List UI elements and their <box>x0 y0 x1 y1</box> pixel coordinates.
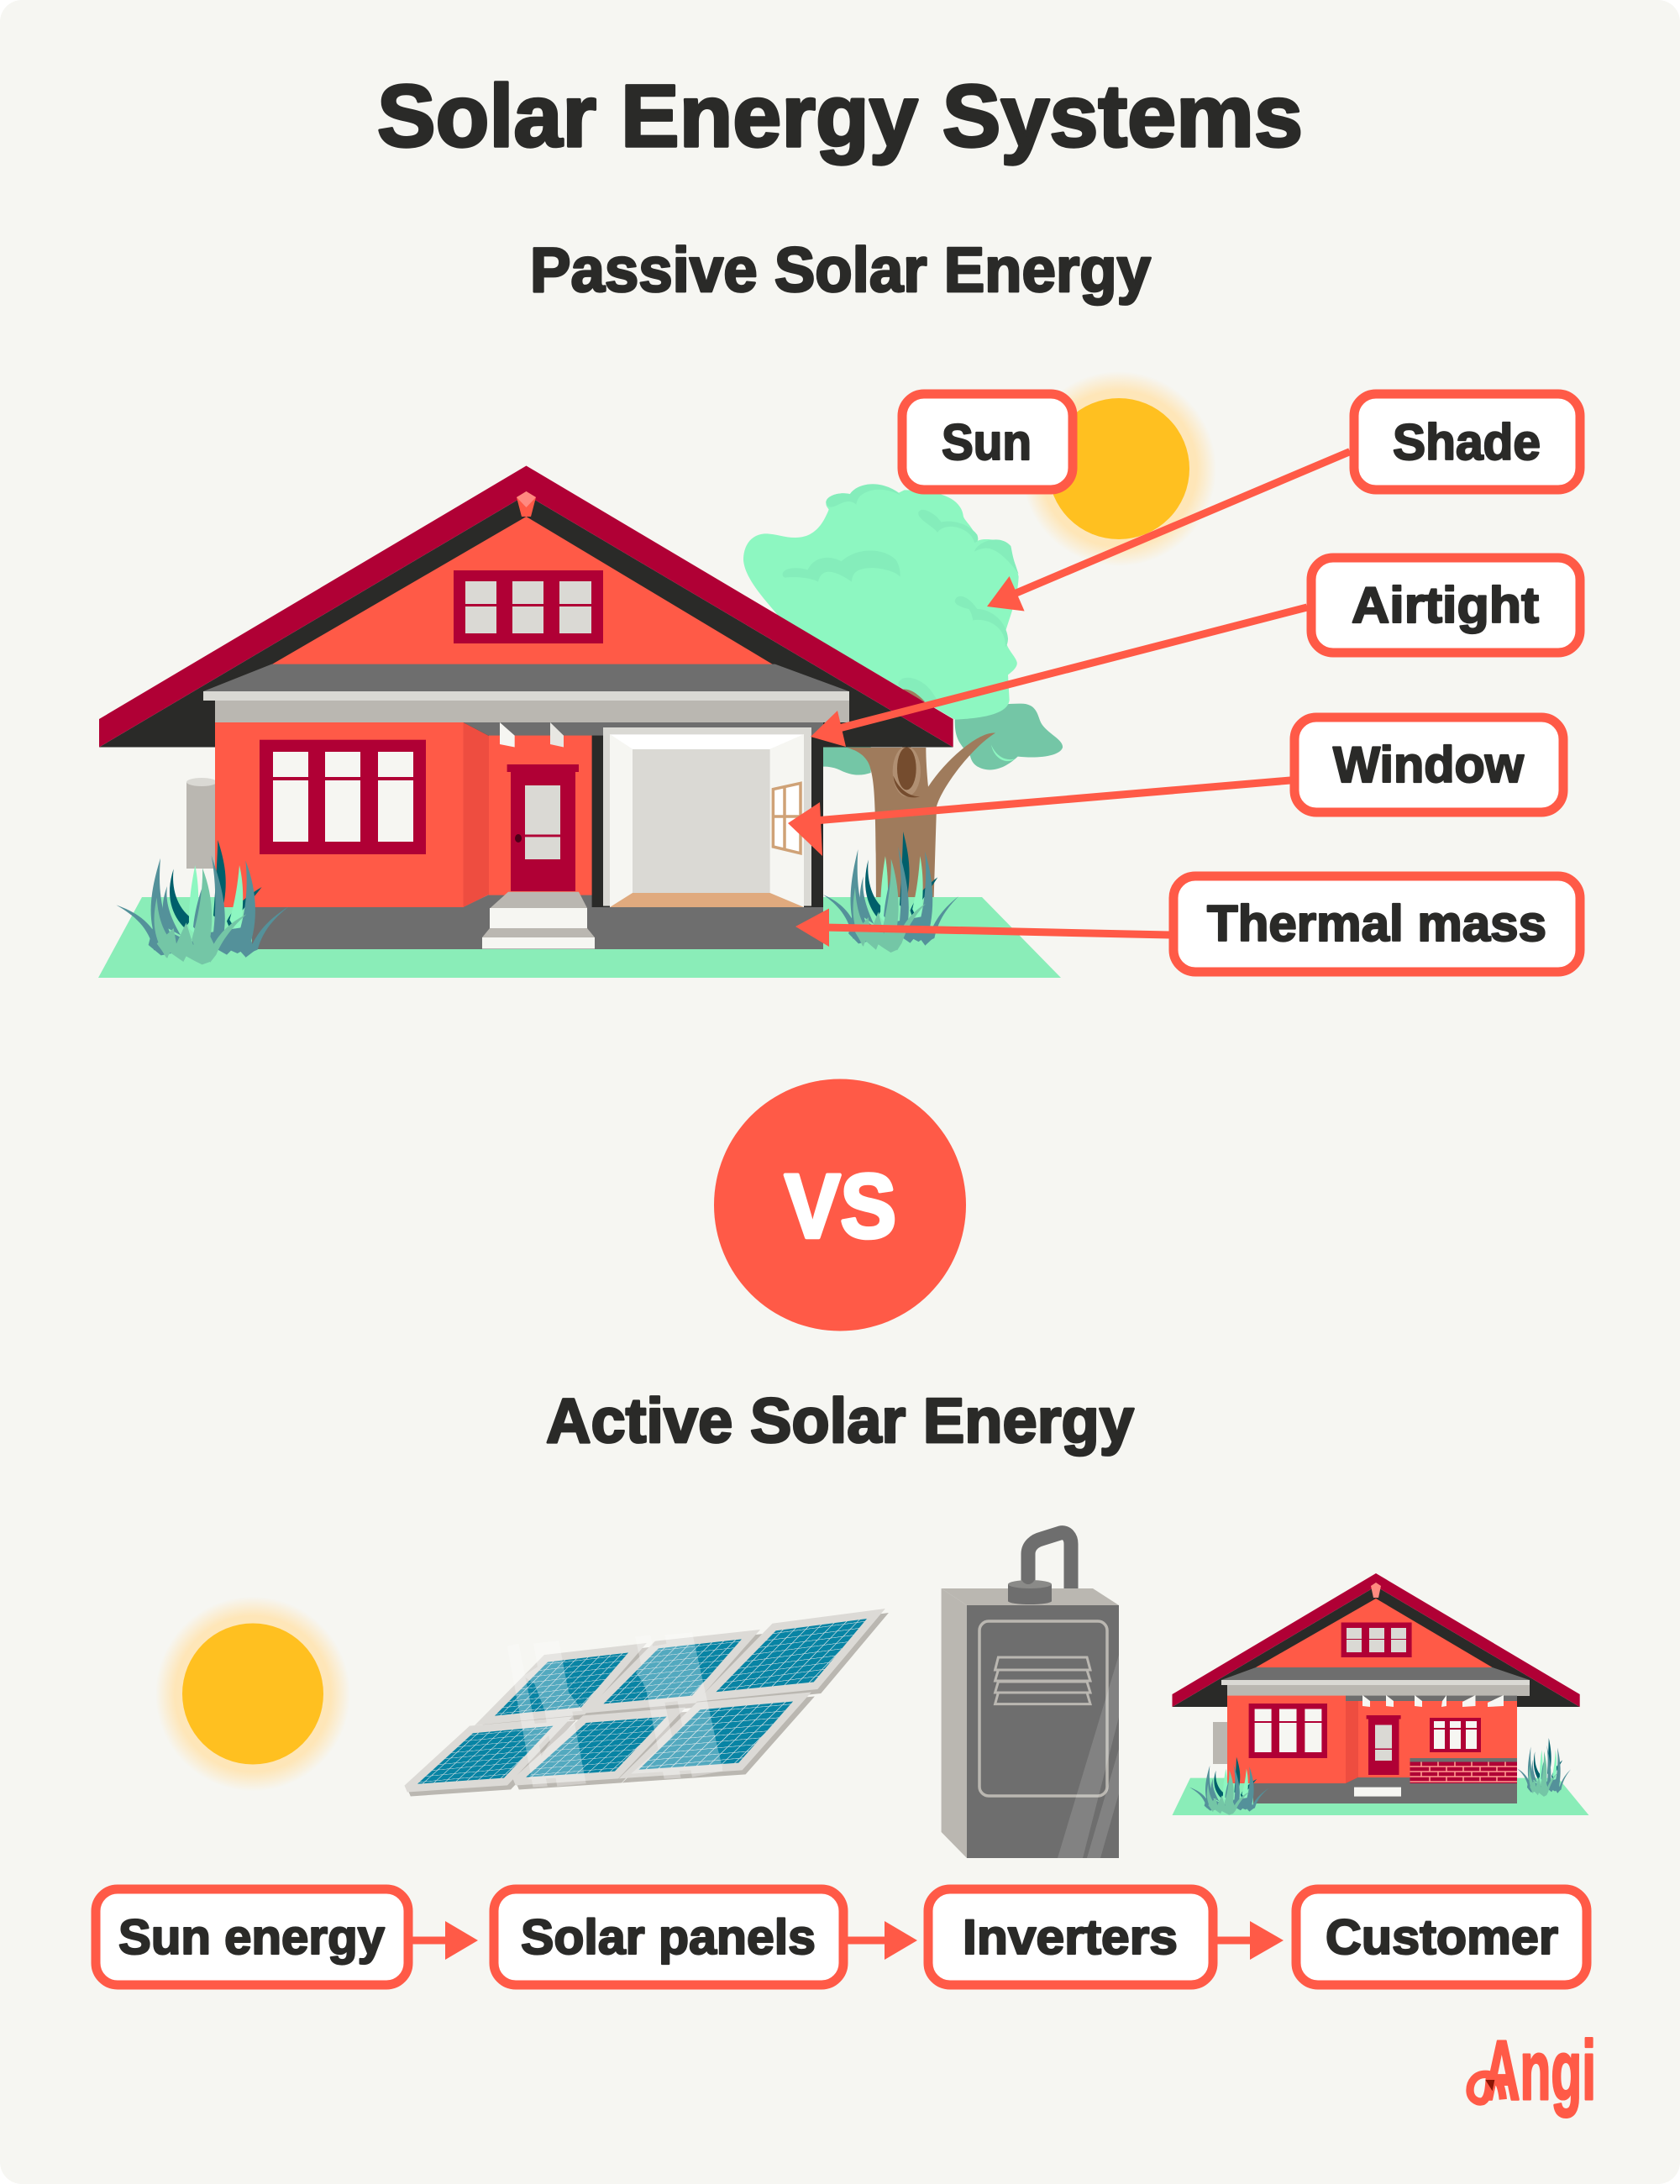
label: sun energy: Sun energy <box>118 1910 385 1965</box>
arrow: shade <box>987 452 1350 612</box>
steps <box>482 892 595 949</box>
porch roof <box>203 664 849 691</box>
vs badge <box>714 1079 966 1331</box>
illustration: inverter <box>942 1533 1119 1858</box>
label: shade <box>1354 394 1580 490</box>
illustration: solar panels <box>407 1614 879 1793</box>
illustration: customer house <box>1173 1573 1589 1815</box>
label: airtight <box>1311 558 1580 653</box>
label: inverters <box>928 1889 1213 1985</box>
arrow: sun energy to solar panels <box>412 1921 478 1960</box>
corbels <box>500 722 515 748</box>
label: window <box>1294 717 1563 812</box>
label: inverters: Inverters <box>963 1910 1178 1965</box>
arrow: inverters to customer <box>1216 1921 1284 1960</box>
porch opening <box>603 727 811 907</box>
finial <box>517 491 536 517</box>
arrow: solar panels to inverters <box>848 1921 917 1960</box>
label: sun <box>902 394 1073 490</box>
arrow: airtight <box>811 607 1307 747</box>
illustration: shade tree <box>743 484 1063 942</box>
icon: left grass tuft <box>116 840 288 964</box>
vs badge: VS <box>785 1155 896 1257</box>
label: thermal mass <box>1173 876 1580 972</box>
water tank <box>186 778 217 869</box>
roof underside <box>99 495 953 748</box>
icon: right grass tuft <box>823 832 958 953</box>
arrow: window <box>788 780 1290 856</box>
front door <box>507 764 579 891</box>
heading: passive solar energy: Passive Solar Energy <box>530 234 1151 305</box>
logo: angi: Angi <box>1483 2024 1596 2118</box>
logo: angi <box>1470 2024 1596 2118</box>
arrow: thermal mass <box>795 909 1169 947</box>
lawn <box>98 897 1061 978</box>
label: window: Window <box>1333 737 1524 793</box>
label: customer: Customer <box>1326 1910 1558 1965</box>
label: sun: Sun <box>942 414 1032 470</box>
label: thermal mass: Thermal mass <box>1207 895 1546 952</box>
heading: active solar energy: Active Solar Energy <box>546 1385 1134 1456</box>
label: customer <box>1296 1889 1587 1985</box>
roof <box>99 465 953 748</box>
illustration: passive house <box>98 465 1061 978</box>
title: Solar Energy Systems <box>377 67 1303 165</box>
foundation <box>252 895 823 949</box>
attic window <box>454 570 603 643</box>
label: airtight: Airtight <box>1352 577 1539 633</box>
illustration: active sun <box>155 1596 350 1791</box>
illustration: passive sun <box>1021 371 1216 566</box>
label: sun energy <box>96 1889 408 1985</box>
walls <box>215 722 464 907</box>
side window <box>773 783 801 853</box>
gable <box>272 517 773 664</box>
label: shade: Shade <box>1393 414 1541 470</box>
label: solar panels: Solar panels <box>521 1910 816 1965</box>
label: solar panels <box>494 1889 843 1985</box>
main window <box>260 740 426 854</box>
